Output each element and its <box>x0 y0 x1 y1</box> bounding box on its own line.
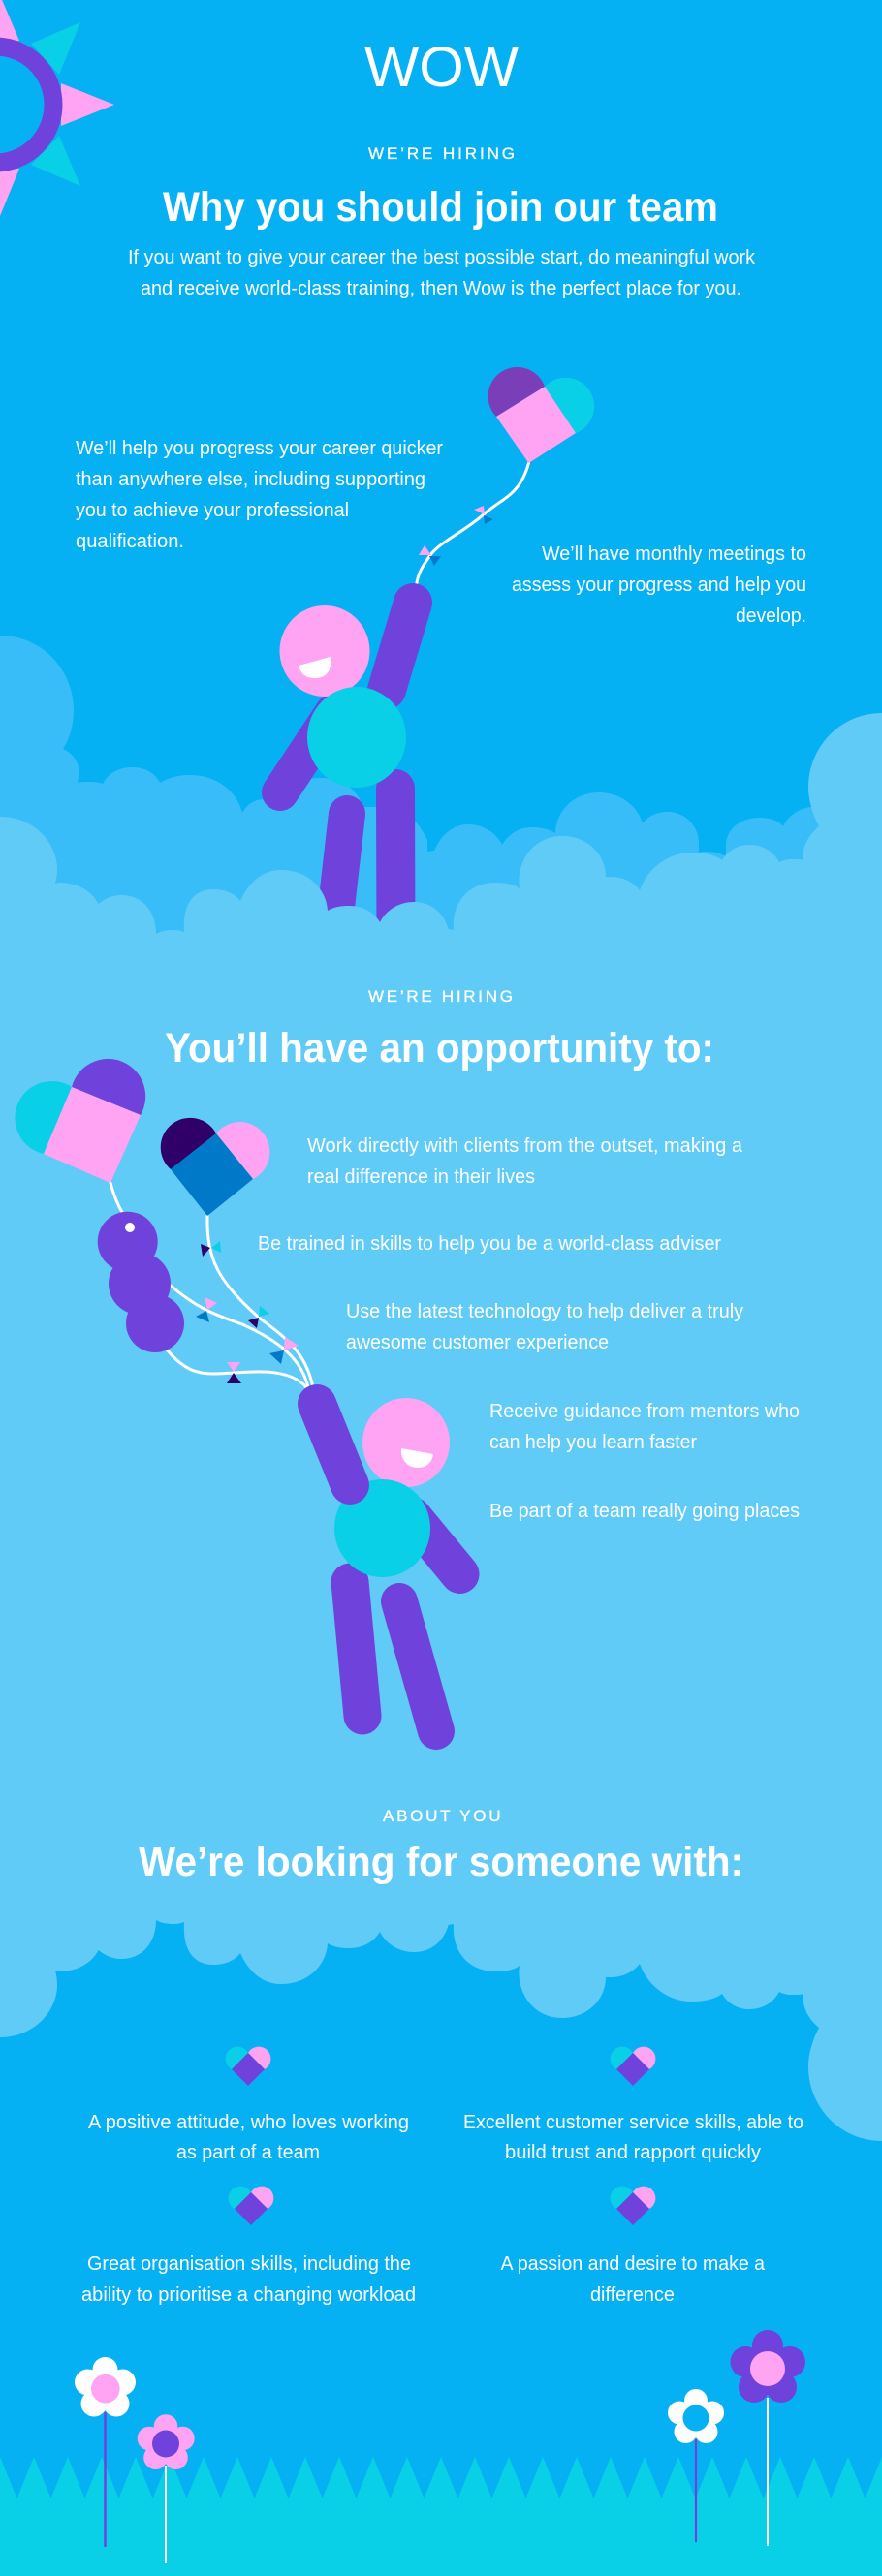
text: positive attitude <box>88 2111 409 2163</box>
text: use the latest technology: awesome customer experience <box>346 1331 609 1353</box>
text: organisation skills: Great organisation skills, including the <box>87 2252 411 2275</box>
text: passion and desire <box>500 2252 766 2306</box>
text block: progress your career: qualification. <box>76 530 184 552</box>
icon: heart 3 <box>229 2187 273 2225</box>
eyebrow: we're hiring: WE’RE HIRING <box>368 144 515 163</box>
text: work directly with clients: real difference in their lives <box>307 1165 535 1188</box>
logo: WOW: WOW <box>364 36 519 99</box>
flower: pink with purple centre <box>138 2414 195 2563</box>
text: work directly with clients: Work directly with clients from the outset, making a <box>307 1134 743 1157</box>
figure <box>279 603 413 949</box>
heading: we're looking for someone with: We’re looking for someone with: <box>139 1839 743 1885</box>
icon: heart 2 <box>611 2047 655 2086</box>
text block: monthly meetings <box>512 543 806 627</box>
text: customer service: Excellent customer service skills, able to <box>463 2111 803 2133</box>
text: organisation skills <box>81 2252 416 2306</box>
text: be part of a team: Be part of a team really going places <box>489 1500 800 1522</box>
flower: white ring <box>668 2389 724 2542</box>
text: receive guidance from mentors <box>489 1400 800 1453</box>
text: use the latest technology <box>346 1300 744 1353</box>
text block: progress your career: than anywhere else, including supporting <box>76 468 425 490</box>
text: use the latest technology: Use the latest technology to help deliver a truly <box>346 1300 744 1322</box>
text: organisation skills: ability to prioritise a changing workload <box>81 2283 416 2306</box>
clouds: underside of section <box>0 1427 882 2141</box>
text block: monthly meetings: develop. <box>736 605 806 627</box>
clouds: front layer and section background <box>0 713 882 2141</box>
text block: progress your career: you to achieve your professional <box>76 499 349 521</box>
heart balloon <box>488 367 594 463</box>
text: receive guidance from mentors: can help you learn faster <box>489 1431 697 1453</box>
text block: progress your career <box>76 437 443 552</box>
text block: monthly meetings: We’ll have monthly meetings to <box>542 543 806 565</box>
heading: you'll have an opportunity to: You’ll have an opportunity to: <box>165 1025 714 1071</box>
text block: progress your career: We’ll help you progress your career quicker <box>76 437 443 459</box>
balloon: purple caterpillar <box>98 1212 184 1352</box>
flower: white with pink centre <box>75 2357 136 2547</box>
text: be trained in skills: Be trained in skills to help you be a world-class adviser <box>258 1232 721 1255</box>
illustration: person flying heart balloon <box>279 367 594 949</box>
balloon: large heart <box>15 1059 145 1183</box>
text: positive attitude: as part of a team <box>176 2141 320 2163</box>
intro text <box>128 246 756 299</box>
balloon: dark heart <box>161 1118 269 1216</box>
illustration: balloon strings with bows <box>110 1183 313 1387</box>
clouds: back layer <box>0 636 882 969</box>
text: positive attitude: A positive attitude, who loves working <box>88 2111 409 2133</box>
text: passion and desire: A passion and desire to make a <box>500 2252 766 2275</box>
text: receive guidance from mentors: Receive guidance from mentors who <box>489 1400 800 1422</box>
text: customer service: build trust and rapport quickly <box>505 2141 762 2163</box>
icon: sun <box>0 0 114 216</box>
grass <box>0 2457 882 2576</box>
intro text: and receive world-class training, then Wow is the perfect place for you. <box>141 277 741 299</box>
text: work directly with clients <box>307 1134 743 1188</box>
intro text: If you want to give your career the best possible start, do meaningful work <box>128 246 756 268</box>
eyebrow: about you: ABOUT YOU <box>383 1807 500 1825</box>
icon: heart 4 <box>611 2187 655 2225</box>
title: why you should join our team: Why you should join our team <box>163 184 718 231</box>
text block: monthly meetings: assess your progress and help you <box>512 574 806 596</box>
illustration: floating person <box>317 1398 459 1731</box>
text: passion and desire: difference <box>590 2283 675 2306</box>
flower: purple with pink centre <box>731 2330 805 2546</box>
icon: heart 1 <box>226 2047 270 2086</box>
text: customer service <box>463 2111 803 2163</box>
balloon string with bows <box>417 463 529 586</box>
eyebrow: we're hiring 2: WE’RE HIRING <box>368 987 513 1006</box>
